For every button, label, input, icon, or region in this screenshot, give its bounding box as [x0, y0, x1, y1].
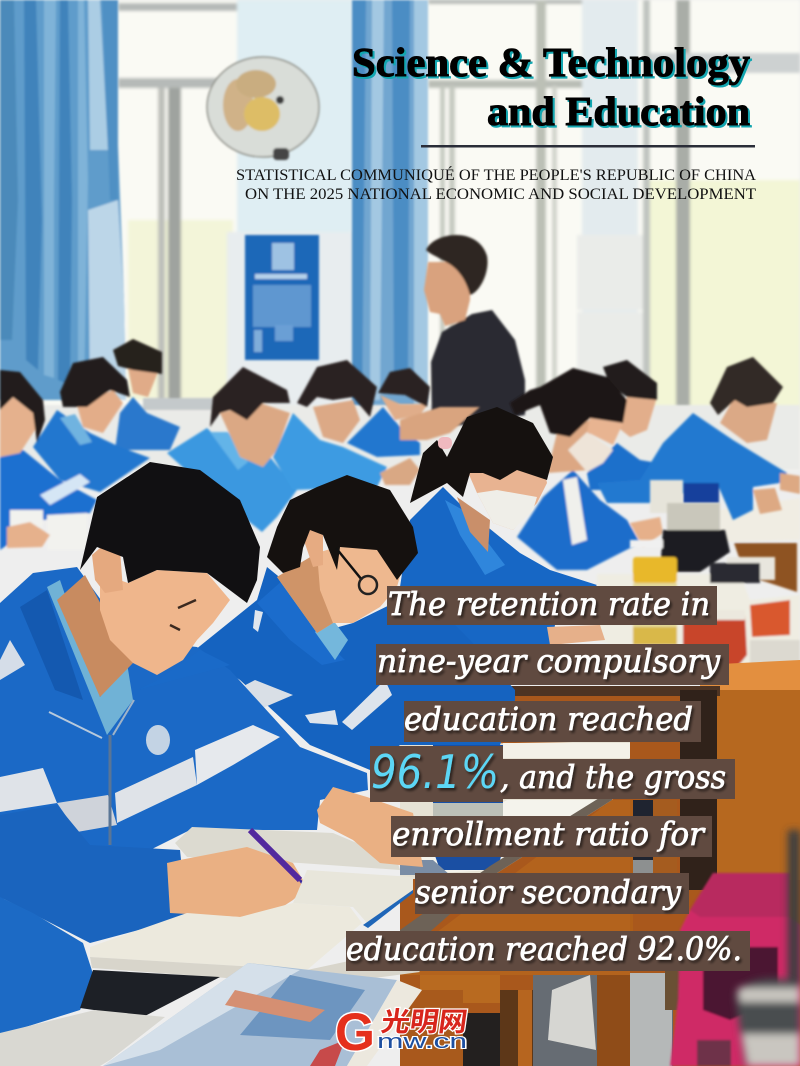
- callout text: enrollment ratio for: [392, 815, 706, 853]
- logo: Guangming Online: [335, 1000, 470, 1062]
- desk supplies, back right: [597, 480, 800, 680]
- student girl, front: [195, 475, 515, 770]
- back row of students: [0, 339, 800, 570]
- logo: Guangming Online: 光明网: [379, 1000, 470, 1039]
- pink stool: [670, 873, 800, 1066]
- centre curtain: [352, 0, 428, 415]
- callout: text highlight bars: [346, 586, 750, 971]
- middle desk surface, bottle and book: [400, 741, 630, 975]
- title: [352, 39, 753, 136]
- highlighted figure 96.1%: 96.1%: [371, 745, 499, 799]
- logo: Guangming Online: G: [335, 1003, 375, 1062]
- dark desk drawer: [80, 970, 220, 1017]
- student boy, front: [0, 462, 423, 1035]
- subtitle: ON THE 2025 NATIONAL ECONOMIC AND SOCIAL DEVELOPMENT: [245, 186, 756, 203]
- logo: Guangming Online: mw.cn: [377, 1031, 467, 1053]
- lower left book: [0, 1010, 165, 1066]
- open books on front desk: [90, 870, 420, 985]
- teacher: [424, 235, 525, 425]
- icon: wall fan: [207, 57, 319, 160]
- callout text: education reached 92.0%.: [346, 930, 742, 968]
- title: Science & Technology: [352, 39, 751, 85]
- floor and under-desk area: [420, 970, 689, 1066]
- left curtain: [0, 0, 126, 400]
- callout text: senior secondary: [415, 873, 682, 911]
- right desk: [400, 660, 800, 1066]
- callout text: , and the gross: [500, 758, 726, 796]
- subtitle: STATISTICAL COMMUNIQUÉ OF THE PEOPLE'S REPUBLIC OF CHINA: [236, 165, 756, 184]
- classroom background: windows, curtains, wall: [0, 0, 800, 470]
- subtitle: [236, 165, 756, 203]
- callout text: [346, 585, 742, 968]
- title rule: [421, 145, 755, 148]
- title: and Education: [489, 90, 752, 136]
- bottom textbook with blue cover: [103, 963, 422, 1066]
- callout text: education reached: [404, 700, 693, 738]
- foreground blurred object: [735, 830, 800, 1066]
- back row desks and sills: [0, 398, 800, 592]
- title: and Education: [487, 88, 750, 134]
- callout text: nine-year compulsory: [377, 642, 721, 680]
- callout text: The retention rate in: [388, 585, 710, 623]
- title: Science & Technology: [354, 41, 753, 87]
- student wearing mask, centre: [400, 407, 605, 650]
- wall poster: [245, 235, 319, 360]
